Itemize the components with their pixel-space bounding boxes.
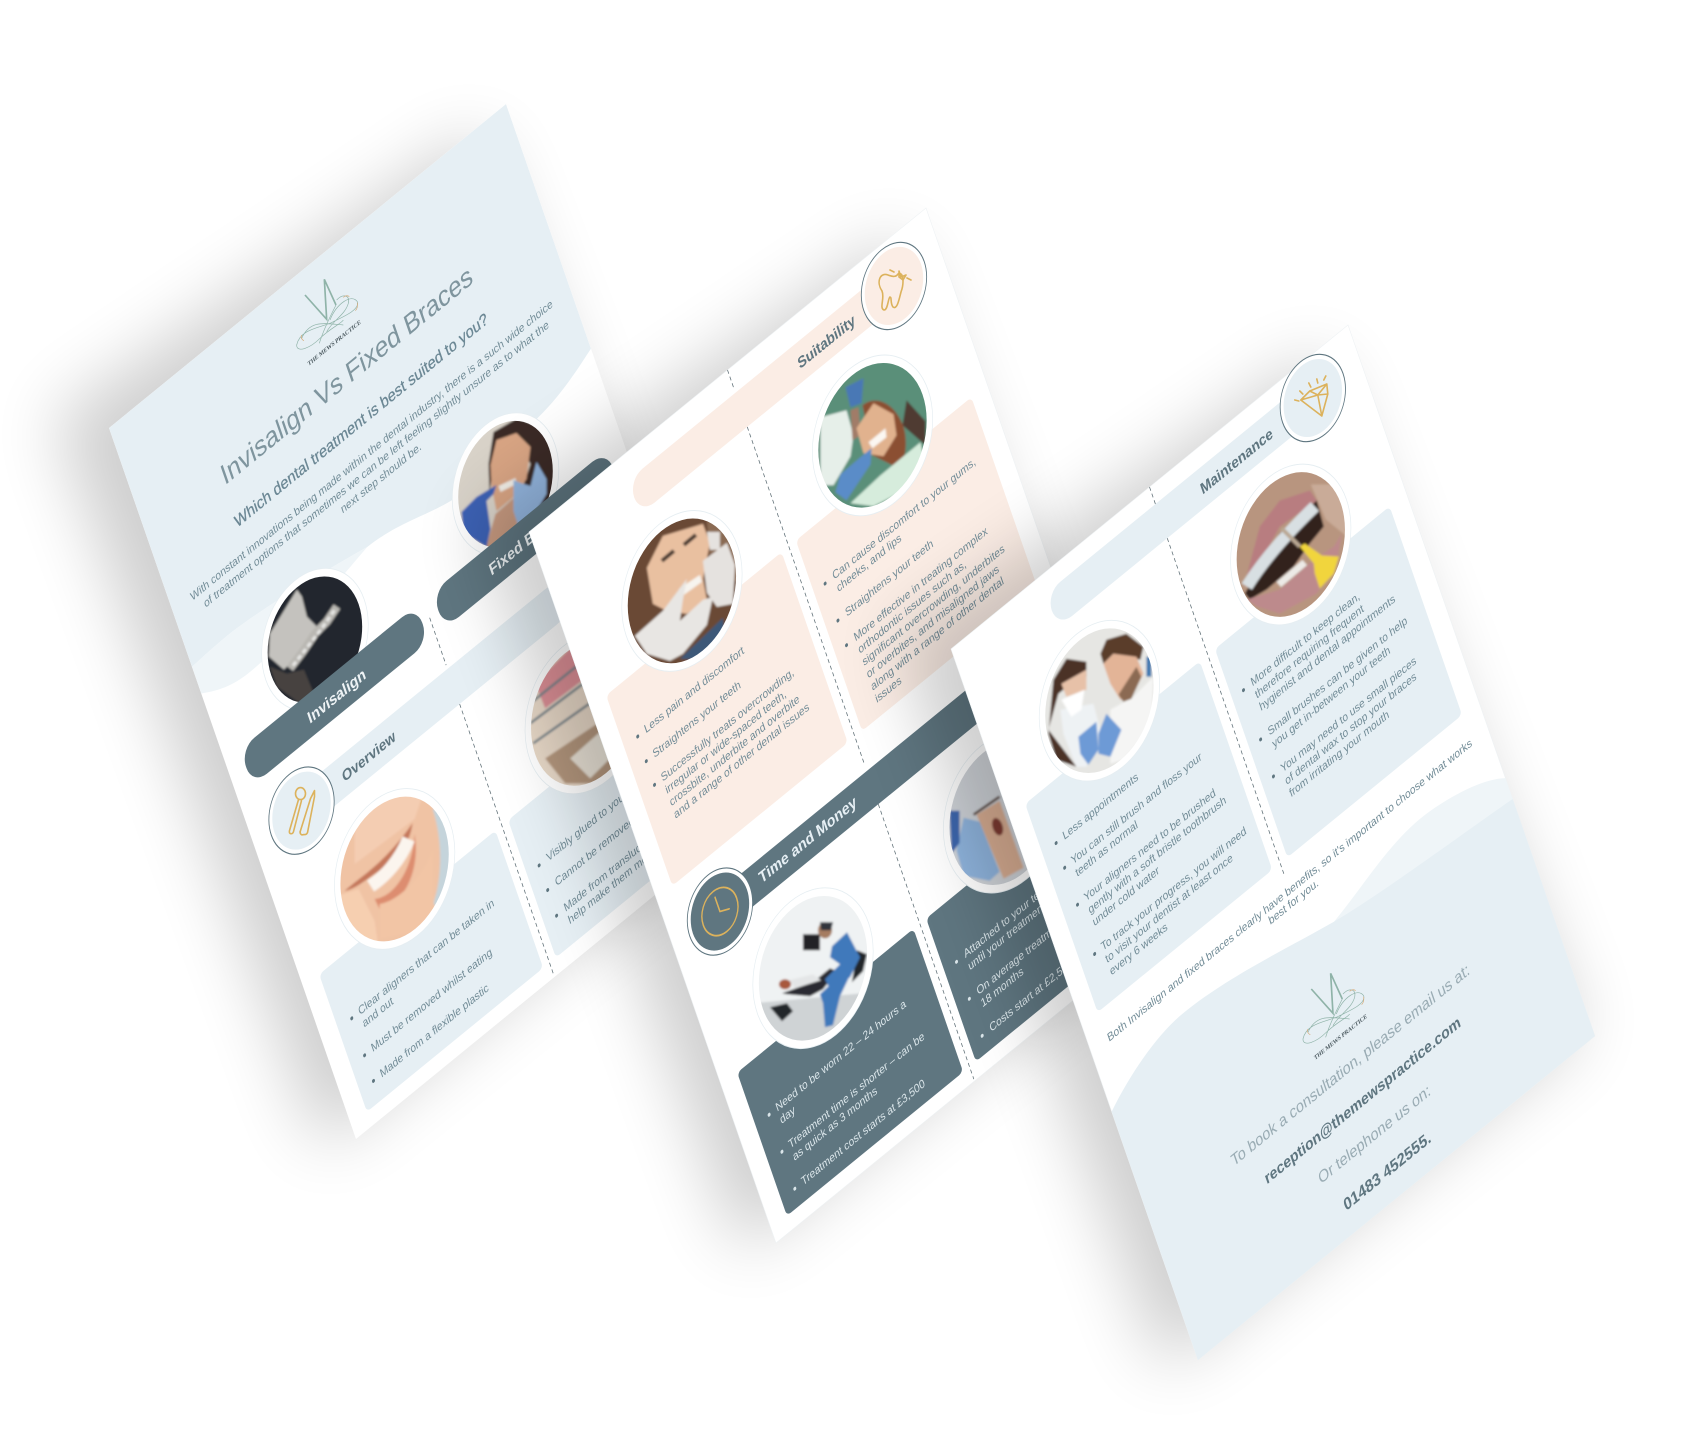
closing text: Both Invisalign and fixed braces clearly have benefits, so it's important to choose what works	[1106, 737, 1474, 1045]
icon: dental mirror and probe	[289, 788, 314, 835]
photo: gloved dentist with mouth mirror	[950, 750, 1028, 885]
list: Fixed braces suitability: significant overcrowding, underbites	[861, 542, 1006, 669]
shadow: page two	[474, 234, 1160, 1254]
icon: tooth with sparkles	[879, 270, 911, 310]
logo mark: crown monogram	[297, 279, 358, 349]
section bar: Suitability	[628, 266, 902, 514]
closing text: best for you.	[1267, 877, 1320, 928]
list: Invisalign time and money: day	[779, 1104, 797, 1127]
icon circle: Time and Money	[677, 851, 763, 972]
list: Invisalign maintenance: teeth as normal	[1074, 819, 1139, 880]
list: Fixed braces time and money: On average treatment takes 12 –	[975, 880, 1110, 998]
photo: clear aligner in gloved hand	[268, 576, 362, 702]
page two background	[529, 208, 1173, 1243]
panel: invisalign overview	[319, 831, 543, 1112]
list: Invisalign suitability: crossbite, underbite and overbite	[668, 693, 801, 809]
bar: Fixed Braces: Fixed Braces	[487, 501, 569, 580]
icon circle: Maintenance	[1270, 337, 1356, 459]
list: Invisalign time and money	[766, 993, 939, 1195]
list: Fixed braces suitability: cheeks, and lips	[835, 532, 903, 595]
list: Invisalign maintenance: under cold water	[1091, 864, 1161, 929]
intro text: With constant innovations being made within the dental industry, there is a such wide choice	[189, 298, 554, 604]
list: Invisalign time and money: Need to be worn 22 – 24 hours a	[774, 997, 908, 1115]
list: Invisalign overview: Clear aligners that can be taken in	[357, 897, 496, 1018]
page three: maintenance and contact	[951, 325, 1595, 1360]
list: Fixed braces time and money	[953, 837, 1131, 1043]
list: Invisalign maintenance	[1053, 714, 1256, 985]
list: Invisalign maintenance: gently with a soft bristle toothbrush	[1087, 794, 1228, 917]
list: Invisalign suitability: Less pain and discomfort	[643, 644, 746, 736]
photo: dentist treating patient	[759, 896, 868, 1041]
photo: woman with gloved hands at mouth	[628, 518, 736, 664]
panel: fixed braces maintenance	[1215, 506, 1462, 858]
photo: interdental brush on braces	[1236, 472, 1345, 617]
logo mark: crown monogram footer	[1303, 973, 1364, 1043]
panel: fixed braces overview	[508, 676, 732, 958]
panel: invisalign maintenance	[1025, 661, 1272, 1012]
list: Fixed braces time and money: Attached to your teeth permanently	[963, 837, 1105, 961]
photo: dentist and nurse	[1045, 628, 1154, 773]
contact text: reception@themewspractice.com	[1263, 1014, 1463, 1188]
contact text	[1229, 960, 1509, 1277]
photo: smile with aligner	[340, 796, 449, 942]
list: Fixed braces suitability: issues	[874, 674, 903, 706]
list: Fixed braces suitability: Can cause discomfort to your gums,	[831, 456, 977, 583]
list: Invisalign maintenance: Less appointments	[1061, 771, 1140, 843]
list: Fixed braces suitability: More effective in treating complex	[853, 525, 989, 644]
list: Invisalign suitability: and a range of other dental issues	[673, 701, 811, 822]
list: Fixed braces overview	[536, 746, 703, 935]
intro text: of treatment options that sometimes we can be left feeling slightly unsure as to what the	[203, 319, 550, 611]
list: Fixed braces maintenance: You may need to use small pieces	[1279, 654, 1418, 776]
bar: Invisalign	[240, 606, 429, 785]
list: Fixed braces suitability	[822, 456, 1020, 714]
list: Invisalign overview: Made from a flexible plastic	[379, 981, 490, 1081]
page three background	[951, 325, 1595, 1360]
subtitle: Which dental treatment is best suited to you?	[232, 309, 490, 532]
list: Fixed braces maintenance: of dental wax to stop your braces	[1284, 670, 1418, 788]
section bar: Suitability: Suitability	[796, 311, 858, 373]
list: Fixed braces maintenance: you get in-between your teeth	[1271, 644, 1392, 751]
list: Invisalign maintenance: To track your progress, you will need	[1100, 825, 1248, 954]
list: Fixed braces time and money: Costs start at £2,500	[988, 957, 1074, 1035]
list: Fixed braces overview: help make them more discreet	[567, 818, 691, 927]
intro text: next step should be.	[340, 440, 423, 516]
section bar: Overview: Overview	[340, 727, 398, 786]
list: Fixed braces time and money: 18 months	[980, 965, 1025, 1010]
list: Invisalign maintenance: You can still brush and floss your	[1070, 750, 1203, 868]
icon circle: Overview	[259, 750, 344, 871]
list: Fixed braces maintenance: from irritating your mouth	[1288, 708, 1391, 800]
icon circle: Suitability	[851, 225, 937, 347]
panel: invisalign time and money	[737, 929, 963, 1216]
list: Invisalign maintenance: Your aligners need to be brushed	[1083, 787, 1217, 905]
list: Fixed braces time and money: until your treatment is complete	[967, 861, 1094, 973]
contact text: To book a consultation, please email us at:	[1229, 960, 1472, 1170]
panel: fixed braces suitability	[796, 397, 1038, 731]
page one: introduction and overview	[109, 104, 654, 1138]
section bar: Maintenance: Maintenance	[1198, 425, 1275, 499]
list: Fixed braces suitability: along with a range of other dental	[870, 575, 1005, 694]
list: Invisalign maintenance: every 6 weeks	[1108, 921, 1169, 978]
list: Fixed braces overview: Made from translucent ceramic to	[563, 796, 698, 915]
list: Fixed braces maintenance: therefore requiring frequent	[1254, 602, 1366, 702]
list: Invisalign suitability: Straightens your teeth	[652, 679, 742, 761]
list: Fixed braces suitability: Straightens your teeth	[844, 538, 935, 620]
list: Fixed braces maintenance: Small brushes can be given to help	[1267, 615, 1409, 739]
shadow: page one	[54, 130, 740, 1150]
section bar: Maintenance	[1046, 376, 1324, 628]
photo: fixed metal braces close-up	[531, 650, 611, 786]
list: Fixed braces maintenance: hygienist and dental appointments	[1258, 593, 1397, 714]
list: Invisalign time and money: as quick as 3 months	[791, 1084, 879, 1164]
footer wave	[1101, 756, 1595, 1360]
page two: suitability and time and money	[528, 208, 1072, 1242]
contact text: 01483 452555.	[1341, 1128, 1433, 1215]
list: Invisalign overview: Must be removed whilst eating	[370, 946, 494, 1055]
contact text: Or telephone us on:	[1316, 1081, 1433, 1188]
list: Invisalign suitability: irregular or wide-spaced teeth,	[664, 688, 788, 797]
list: Invisalign maintenance: to visit your dentist at least once	[1104, 852, 1234, 966]
icon: diamond	[1295, 376, 1328, 416]
list: Fixed braces maintenance: More difficult to keep clean,	[1250, 590, 1361, 689]
panel: invisalign suitability	[606, 552, 848, 886]
logo wordmark: The Mews Practice: THE MEWS PRACTICE	[307, 320, 362, 368]
logo wordmark: The Mews Practice footer: THE MEWS PRACTICE	[1314, 1014, 1368, 1062]
header wave	[109, 104, 603, 708]
list: Fixed braces suitability: orthodontic issues such as,	[857, 558, 968, 657]
list: Invisalign suitability	[634, 615, 811, 829]
list: Invisalign time and money: Treatment time is shorter – can be	[787, 1030, 926, 1152]
list: Invisalign suitability: Successfully treats overcrowding,	[660, 666, 795, 785]
list: Invisalign overview: and out	[361, 995, 395, 1030]
photo: girl with braces	[458, 420, 553, 546]
shadow: page three	[896, 351, 1582, 1371]
section bar: Time and Money	[708, 677, 993, 934]
list: Fixed braces overview: Visibly glued to your teeth	[545, 770, 651, 865]
list: Invisalign time and money: Treatment cost starts at £3,500	[800, 1077, 926, 1189]
panel: fixed braces time and money	[926, 775, 1152, 1062]
section bar: Overview	[289, 578, 571, 834]
page one background	[109, 104, 654, 1138]
list: Fixed braces maintenance	[1240, 565, 1430, 808]
photo: smiling woman at dentist	[818, 363, 927, 508]
title: Invisalign Vs Fixed Braces	[217, 259, 476, 491]
section bar: Time and Money: Time and Money	[757, 793, 859, 888]
bar: Fixed Braces	[432, 450, 619, 629]
list: Fixed braces overview: Cannot be removed	[554, 814, 636, 889]
list: Invisalign overview	[348, 897, 517, 1088]
bar: Invisalign: Invisalign	[306, 665, 368, 728]
list: Fixed braces suitability: or overbites, and misaligned jaws	[865, 563, 1001, 681]
